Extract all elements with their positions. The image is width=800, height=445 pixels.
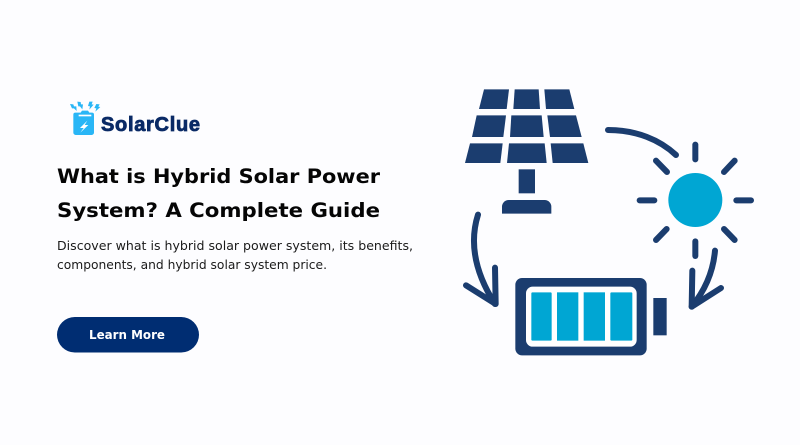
arrow: sun to battery [692,251,721,307]
icon: solar panel [465,89,588,214]
body text: Discover what is hybrid solar power system, its benefits, [57,239,413,253]
heading: What is Hybrid Solar Power [57,165,380,188]
arrow: panel to sun [608,130,676,155]
icon: battery with lightning bolts [70,102,100,135]
icon: sun [640,145,751,256]
arrow: panel to battery [466,215,496,304]
button: Learn More: Learn More [89,327,165,342]
icon: battery [515,278,667,355]
logo: SolarClue [70,102,200,136]
heading [57,165,380,222]
logo wordmark: SolarClue [101,114,200,136]
body text: components, and hybrid solar system price. [57,258,327,272]
body text [57,239,413,272]
heading: System? A Complete Guide [57,199,380,222]
button: Learn More [57,317,199,352]
